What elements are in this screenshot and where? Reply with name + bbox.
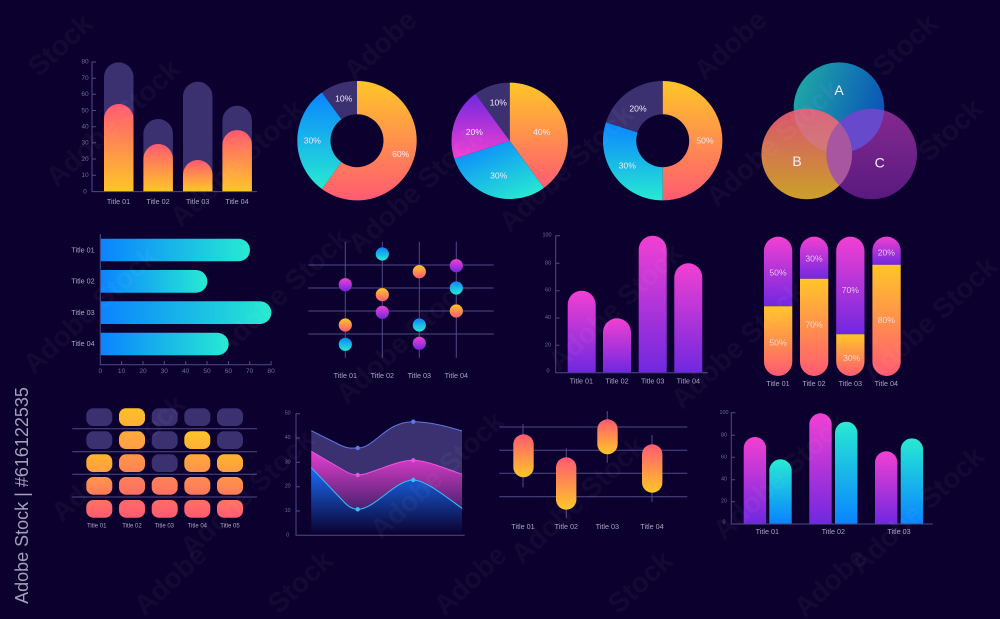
- chart: horizontal bars: 10: [118, 368, 126, 375]
- chart: horizontal bars: 40: [182, 368, 190, 375]
- watermark pattern: Adobe: [128, 539, 212, 619]
- chart: stacked pills: 70%: [805, 320, 823, 330]
- stock id side label: Adobe Stock | #616122535: [12, 387, 32, 604]
- chart: donut 50 30 20: 30%: [619, 161, 636, 171]
- chart: dot grid: Title 02: [371, 371, 394, 380]
- chart: layered bar chart: 80: [81, 58, 89, 66]
- chart: layered area: 10: [285, 508, 291, 514]
- chart: horizontal bars: 50: [203, 368, 211, 375]
- chart: stacked pills: 30%: [843, 353, 861, 363]
- chart: purple bar chart: 60: [545, 288, 551, 294]
- chart: grouped bars: 40: [721, 477, 727, 483]
- watermark pattern: Adobe Stock: [209, 222, 355, 362]
- chart: layered area: 50: [285, 411, 291, 417]
- watermark pattern: Stock: [262, 544, 339, 619]
- chart: candlesticks: Title 04: [640, 522, 664, 531]
- chart: donut 60 30 10: [297, 81, 417, 200]
- chart: purple bar chart: 0: [546, 369, 550, 375]
- chart: stacked pills: [764, 237, 901, 388]
- chart: donut 50 30 20: 50%: [696, 136, 714, 146]
- chart: candlesticks: Title 02: [555, 522, 578, 531]
- chart: layered area: 0: [286, 532, 289, 538]
- watermark pattern: Adobe Stock: [364, 405, 510, 545]
- chart: stacked pills: 80%: [878, 315, 895, 325]
- chart: venn diagram: B: [792, 153, 802, 169]
- chart: candlesticks: Title 01: [511, 522, 535, 531]
- chart: venn diagram: [761, 62, 917, 199]
- chart: donut 60 30 10: 60%: [392, 149, 410, 159]
- chart: purple bar chart: Title 04: [677, 376, 700, 386]
- chart: heat map: Title 04: [188, 524, 208, 530]
- chart: heat map: Title 01: [87, 524, 107, 530]
- chart: stacked pills: 70%: [842, 285, 859, 295]
- watermark pattern: Adobe Stock: [505, 430, 651, 570]
- chart: pie 40 30 20 10: 30%: [490, 170, 508, 180]
- watermark pattern: Adobe Stock: [17, 240, 163, 380]
- chart: stacked pills: Title 03: [839, 379, 862, 388]
- chart: layered area: [285, 411, 465, 538]
- chart: heat map: Title 02: [122, 524, 142, 530]
- chart: dot grid: Title 03: [408, 371, 431, 380]
- chart: pie 40 30 20 10: 40%: [533, 127, 551, 137]
- chart: donut 50 30 20: [603, 81, 722, 200]
- chart: layered area: 20: [285, 484, 291, 490]
- chart: layered bar chart: 10: [81, 172, 89, 179]
- chart: layered bar chart: 70: [81, 75, 89, 82]
- chart: horizontal bars: [71, 234, 275, 375]
- chart: pie 40 30 20 10: 10%: [490, 97, 507, 107]
- chart: heat map: [72, 408, 257, 530]
- chart: grouped bars: Title 01: [756, 527, 779, 536]
- watermark pattern: Adobe Stock: [542, 237, 688, 377]
- chart: horizontal bars: 0: [98, 368, 102, 375]
- chart: grouped bars: 60: [721, 454, 727, 460]
- chart: grouped bars: 100: [720, 410, 728, 416]
- chart: layered area: 30: [285, 459, 291, 465]
- chart: stacked pills: Title 02: [802, 379, 826, 388]
- chart: purple bar chart: Title 03: [641, 376, 664, 386]
- chart: pie 40 30 20 10: 20%: [466, 127, 483, 137]
- chart: grouped bars: 80: [721, 432, 727, 438]
- chart: horizontal bars: Title 01: [71, 246, 95, 254]
- chart: candlesticks: [499, 411, 687, 531]
- chart: stacked pills: 50%: [769, 337, 787, 347]
- watermark pattern: Adobe Stock: [330, 270, 476, 410]
- chart: candlesticks: Title 03: [596, 522, 619, 531]
- watermark pattern: Adobe Stock: [857, 250, 1000, 390]
- watermark pattern: Adobe Stock: [493, 98, 639, 238]
- chart: purple bar chart: 100: [542, 233, 552, 239]
- chart: grouped bars: [720, 410, 933, 536]
- chart: dot grid: [308, 242, 494, 380]
- chart: horizontal bars: 20: [139, 368, 147, 375]
- chart: dot grid: Title 04: [445, 371, 468, 380]
- chart: horizontal bars: 70: [246, 368, 254, 375]
- chart: venn diagram: A: [834, 82, 844, 98]
- chart: layered bar chart: Title 03: [186, 197, 209, 206]
- chart: layered bar chart: 50: [81, 108, 89, 114]
- watermark pattern: Adobe Stock: [342, 120, 488, 260]
- watermark pattern: Stock: [867, 7, 944, 82]
- watermark pattern: Adobe Stock: [174, 423, 320, 563]
- chart: horizontal bars: Title 02: [71, 276, 95, 286]
- watermark pattern: Adobe Stock: [40, 53, 186, 193]
- watermark pattern: Adobe: [688, 4, 772, 86]
- chart: grouped bars: 0: [722, 520, 726, 526]
- chart: horizontal bars: 80: [267, 368, 275, 375]
- chart: layered bar chart: 20: [81, 156, 89, 163]
- chart: donut 60 30 10: 30%: [304, 136, 321, 146]
- chart: layered bar chart: Title 04: [225, 197, 249, 206]
- chart: purple bar chart: [542, 233, 708, 386]
- chart: donut 60 30 10: 10%: [335, 94, 353, 104]
- chart: grouped bars: Title 03: [887, 527, 911, 536]
- chart: layered bar chart: 0: [83, 188, 87, 196]
- watermark pattern: Stock: [22, 7, 99, 82]
- watermark pattern: Adobe Stock: [665, 275, 811, 415]
- chart: purple bar chart: Title 02: [605, 376, 629, 386]
- chart: venn diagram: C: [875, 154, 885, 170]
- watermark pattern: Adobe Stock: [700, 73, 846, 213]
- chart: stacked pills: 30%: [805, 253, 823, 263]
- chart: purple bar chart: 40: [545, 315, 551, 321]
- watermark pattern: Adobe Stock: [164, 93, 310, 233]
- chart: layered bar chart: 30: [81, 140, 89, 146]
- watermark pattern: Stock: [602, 544, 679, 619]
- chart: pie 40 30 20 10: [452, 83, 568, 199]
- chart: stacked pills: 20%: [878, 247, 895, 257]
- chart: layered bar chart: Title 01: [107, 197, 130, 206]
- chart: grouped bars: 20: [721, 499, 727, 505]
- watermark pattern: Adobe Stock: [45, 388, 191, 528]
- chart: layered area: 40: [285, 435, 291, 441]
- chart: stacked pills: 50%: [769, 268, 787, 278]
- chart: stacked pills: Title 01: [766, 379, 790, 388]
- chart: horizontal bars: Title 03: [71, 308, 95, 317]
- chart: dot grid: Title 01: [334, 371, 357, 380]
- chart: layered bar chart: 60: [81, 91, 89, 98]
- chart: heat map: Title 03: [155, 524, 175, 530]
- chart: heat map: Title 05: [220, 524, 240, 530]
- watermark pattern: Adobe Stock: [707, 406, 853, 546]
- chart: purple bar chart: 80: [545, 260, 551, 266]
- watermark pattern: Adobe Stock: [844, 440, 990, 580]
- chart: horizontal bars: 30: [161, 368, 168, 375]
- chart: layered bar chart: 40: [81, 124, 89, 130]
- chart: purple bar chart: Title 01: [570, 376, 593, 386]
- chart: purple bar chart: 20: [545, 342, 551, 348]
- chart: horizontal bars: Title 04: [71, 339, 95, 348]
- watermark pattern: Adobe: [338, 4, 422, 86]
- chart: layered bar chart: [81, 58, 257, 206]
- chart: stacked pills: Title 04: [875, 379, 898, 388]
- chart: donut 50 30 20: 20%: [629, 103, 647, 113]
- chart: horizontal bars: 60: [225, 368, 232, 375]
- chart: layered bar chart: Title 02: [146, 197, 170, 206]
- watermark pattern: Stock: [912, 92, 989, 167]
- watermark pattern: Adobe: [428, 539, 512, 619]
- chart: grouped bars: Title 02: [822, 527, 845, 536]
